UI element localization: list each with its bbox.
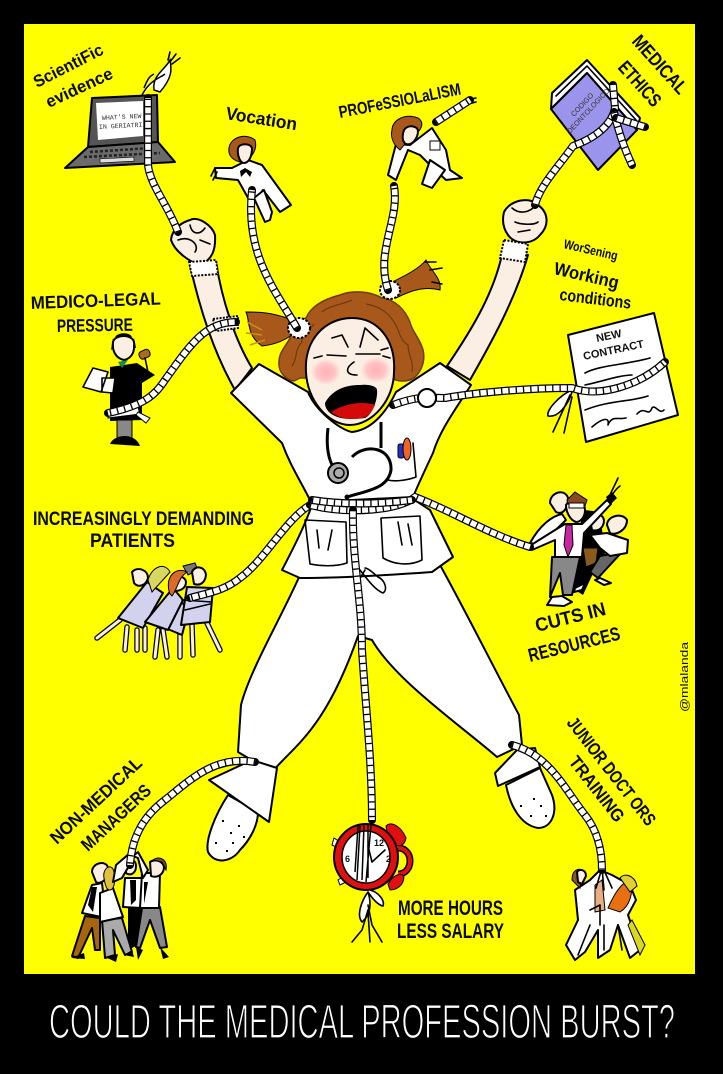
stethoscope: [327, 422, 391, 500]
laptop screen text: WHAT'S NEW: [102, 113, 142, 122]
rope: ethics to right hand: [535, 85, 645, 205]
cheeks: [311, 357, 391, 385]
label: medical ethics: ETHICS: [613, 57, 665, 111]
label: cuts in resources: RESOURCES: [526, 624, 622, 667]
rope: contract to neck: [393, 362, 665, 405]
label: non-medical managers: NON-MEDICAL: [46, 753, 146, 848]
tunic top: [231, 363, 471, 502]
right cuff and shoe: [495, 748, 554, 828]
label: junior doctors training: JUNIOR DOCT ORS: [563, 713, 660, 829]
rope: professional to hand: [436, 100, 470, 122]
laptop screen text: IN GERIATRI: [99, 122, 143, 131]
label: scientific evidence: evidence: [43, 64, 116, 112]
rope: scientific evidence to left hand: [148, 98, 178, 232]
back figures: [572, 510, 605, 595]
left hair tie: [288, 318, 310, 338]
clock numerals: [345, 838, 391, 864]
label: increasingly demanding patients: INCREASINGLY DEMANDING: [33, 509, 254, 530]
right ponytail: [388, 260, 442, 298]
clock numerals: 6: [345, 854, 350, 864]
label: worsening working conditions: [552, 236, 632, 313]
central doctor figure: [171, 200, 554, 860]
face lines: [314, 328, 390, 375]
shirts: [82, 883, 106, 918]
breast pocket and pens: [388, 438, 416, 481]
left ponytail: [246, 312, 292, 346]
icon: alarm clock: [332, 824, 410, 942]
patient legs: [97, 620, 220, 657]
label: cuts in resources: [526, 599, 622, 667]
rope: junior doctors to right leg: [512, 745, 602, 870]
left wrist rope: [189, 260, 218, 276]
tunic skirt: [282, 497, 453, 578]
figure: lawyer: [83, 333, 155, 446]
book title: CODIGO: [569, 91, 596, 118]
main man: [550, 557, 580, 597]
icon: laptop: [65, 52, 180, 168]
right arm: [447, 250, 528, 380]
trousers: [72, 916, 100, 958]
credit: @mlalanda: [679, 641, 691, 712]
label: cuts in resources: CUTS IN: [533, 599, 608, 637]
figure: patients group: [97, 563, 220, 657]
label: worsening working conditions: WorSening: [562, 236, 619, 263]
label: worsening working conditions: conditions: [559, 285, 632, 313]
rope: lawyer to left arm: [108, 322, 236, 413]
label: worsening working conditions: Working: [552, 258, 621, 293]
contract bow: [548, 390, 572, 433]
figure: managers group: [71, 852, 169, 962]
tunic waist bow: [356, 568, 385, 593]
raised arms: [113, 852, 148, 882]
right wrist rope: [500, 240, 528, 262]
left fist: [171, 219, 215, 265]
clock numerals: 12: [374, 838, 384, 848]
book title: DEONTOLOGICO: [565, 86, 612, 135]
right hair tie: [380, 281, 400, 299]
label: more hours less salary: MORE HOURS: [398, 897, 503, 920]
patient gowns: [118, 582, 163, 628]
head: [306, 318, 394, 425]
signatures: [592, 407, 664, 427]
rope: vocation to hair: [251, 190, 297, 328]
laptop screen text: [99, 113, 143, 131]
icon: code of ethics book: [551, 60, 640, 170]
figure: cuts in resources group: [528, 478, 628, 606]
rope: clock to waist: [353, 510, 372, 820]
clock numerals: 2: [386, 854, 391, 864]
tunic pockets: [305, 516, 422, 566]
mouth: [325, 385, 377, 419]
hair: [279, 292, 424, 381]
label: scientific evidence: [30, 40, 116, 112]
label: junior doctors training: TRAINING: [565, 752, 629, 826]
label: medico-legal pressure: PRESSURE: [57, 315, 133, 336]
rope: managers to left leg: [130, 761, 255, 865]
rope: professionalism to hair: [384, 186, 395, 290]
figure: vocation doctor: [211, 136, 291, 222]
contract heading: NEW: [595, 328, 623, 345]
rope: resources to waist: [310, 497, 530, 547]
label: medico-legal pressure: MEDICO-LEGAL: [30, 288, 161, 313]
label: vocation: Vocation: [224, 103, 299, 134]
trousers: [238, 565, 522, 772]
icon: new contract: CONTRACT: [582, 338, 645, 363]
hair curls: [292, 300, 412, 372]
figure: junior doctors group: [566, 868, 645, 960]
heads: [92, 863, 108, 883]
label: medico-legal pressure: [30, 288, 161, 336]
label: medical ethics: MEDICAL: [627, 31, 691, 99]
label: more hours less salary: LESS SALARY: [397, 920, 504, 943]
figure: professionalism doctor: [388, 98, 476, 188]
label: increasingly demanding patients: PATIENTS: [90, 531, 175, 552]
patient heads: [132, 569, 148, 586]
left cuff and shoe: [207, 760, 277, 860]
label: non-medical managers: MANAGERS: [77, 780, 155, 855]
knot on neck rope: [418, 389, 436, 407]
label: professiolalism: PROFeSSIOLaLISM: [337, 80, 462, 122]
label: junior doctors training: [563, 713, 660, 829]
left arm rope wrap: [213, 316, 238, 331]
right fist: [503, 200, 547, 242]
label: more hours less salary: [397, 897, 504, 943]
rope ends over laptop: [142, 60, 171, 95]
label: scientific evidence: ScientiFic: [30, 40, 107, 92]
icon: new contract: [548, 313, 678, 442]
label: increasingly demanding patients: [33, 509, 254, 552]
clock bow and rope ends: [360, 890, 383, 922]
shoes: [71, 947, 169, 962]
left arm: [190, 262, 252, 390]
rope: patients to waist: [190, 505, 310, 598]
